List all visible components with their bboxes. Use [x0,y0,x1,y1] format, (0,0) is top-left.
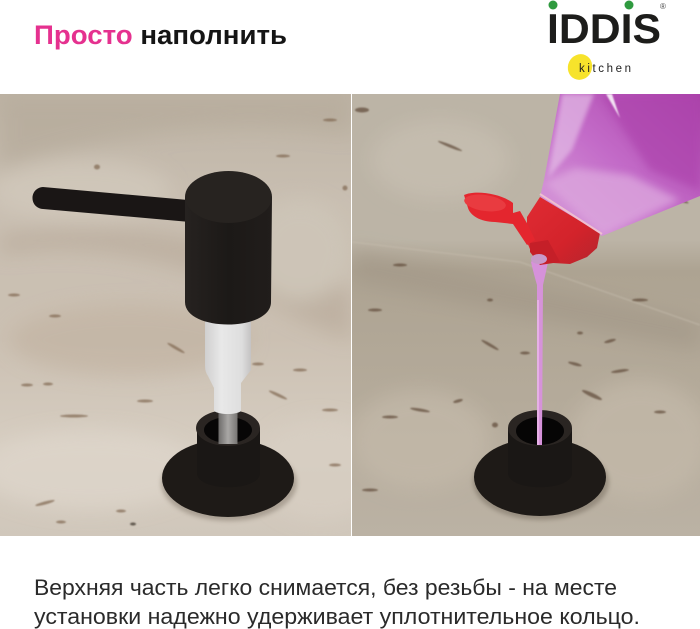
soap stream [531,257,548,445]
description line 1: Верхняя часть легко снимается, без резьбы - на месте [34,575,617,600]
collar body [508,428,572,443]
registered mark: ® [660,2,666,11]
logo wordmark: IDDIS [547,5,661,52]
photo: left, dispenser with top removed [0,94,380,536]
wall and counter edge [529,265,699,325]
grey rod [218,411,238,444]
stone surface right [352,94,700,536]
dispenser pump [32,171,297,521]
dispenser head [185,197,272,324]
description line 2: установки надежно удерживает уплотнительное кольцо. [34,604,640,629]
flip lid [464,193,535,245]
lever [32,187,190,222]
logo dots [548,0,634,10]
title: Просто наполнить [34,20,287,50]
bottle cap [527,197,600,264]
collar [197,428,260,444]
logo: IDDIS kitchen [547,0,666,84]
description text [34,575,640,629]
nozzle [530,240,560,265]
bottle body [540,94,700,236]
yellow blob [564,50,596,84]
white tube [205,320,251,414]
bottle [463,94,700,265]
shadow under flange [472,462,610,522]
receiving collar [473,410,609,520]
stone surface left [0,94,351,536]
photo: right, pouring soap from bottle [350,94,700,536]
flange [474,438,606,516]
base flange [162,439,294,517]
soft shadow [159,463,299,523]
kitchen label: kitchen [579,63,631,75]
